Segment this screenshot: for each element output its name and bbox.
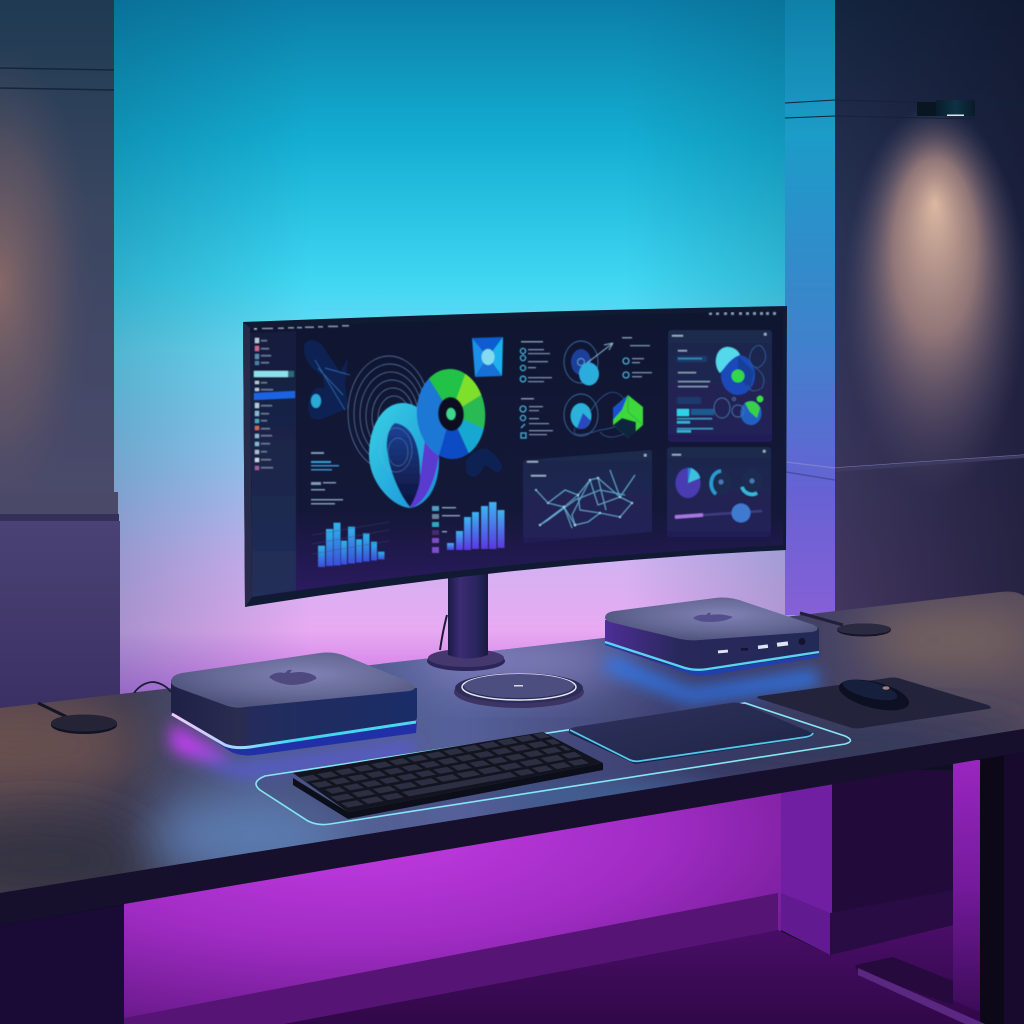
monitor [243, 306, 787, 607]
icon: logo mark [269, 670, 316, 685]
bar chart: right with legend [432, 502, 504, 553]
panel: top right [668, 330, 772, 442]
left pillar [0, 0, 120, 711]
keyboard [293, 732, 603, 819]
donut chart [427, 384, 475, 444]
right pillar [785, 0, 1024, 615]
panel: network graph [523, 450, 652, 543]
device: right mini computer [605, 598, 819, 702]
device: left charging puck [38, 703, 117, 734]
back wall with gradient lighting [100, 0, 800, 700]
floor and baseboards [124, 893, 1024, 1024]
desk surface [0, 592, 1024, 925]
device: left cable [134, 682, 171, 693]
middle column: top group [520, 337, 652, 386]
teardrop chart [369, 403, 439, 508]
panel: gauges [667, 447, 771, 537]
under-desk lit wall [124, 780, 781, 1024]
left desk leg [0, 905, 124, 1024]
icon: wall spotlight [917, 100, 975, 116]
top menu bar [254, 312, 776, 330]
middle column: lower group [520, 392, 643, 438]
concentric rings [348, 356, 430, 470]
mouse pad [757, 678, 991, 728]
mouse [836, 674, 912, 716]
icon: blue square [472, 337, 503, 377]
monitor stand [427, 565, 505, 671]
reflected glow [170, 722, 415, 778]
left text block [311, 452, 343, 504]
right column and leg under desk [781, 745, 1024, 1024]
device: charging pad [454, 673, 584, 708]
ports [718, 638, 806, 653]
device: right charging puck [800, 613, 891, 636]
icon: logo mark [693, 613, 733, 622]
bar chart: left [312, 522, 389, 567]
trackpad [569, 703, 813, 764]
desk mat with glowing outline [256, 703, 850, 825]
dark decorative blobs [304, 340, 502, 477]
sidebar [250, 331, 296, 597]
device: left mini computer [170, 652, 417, 778]
